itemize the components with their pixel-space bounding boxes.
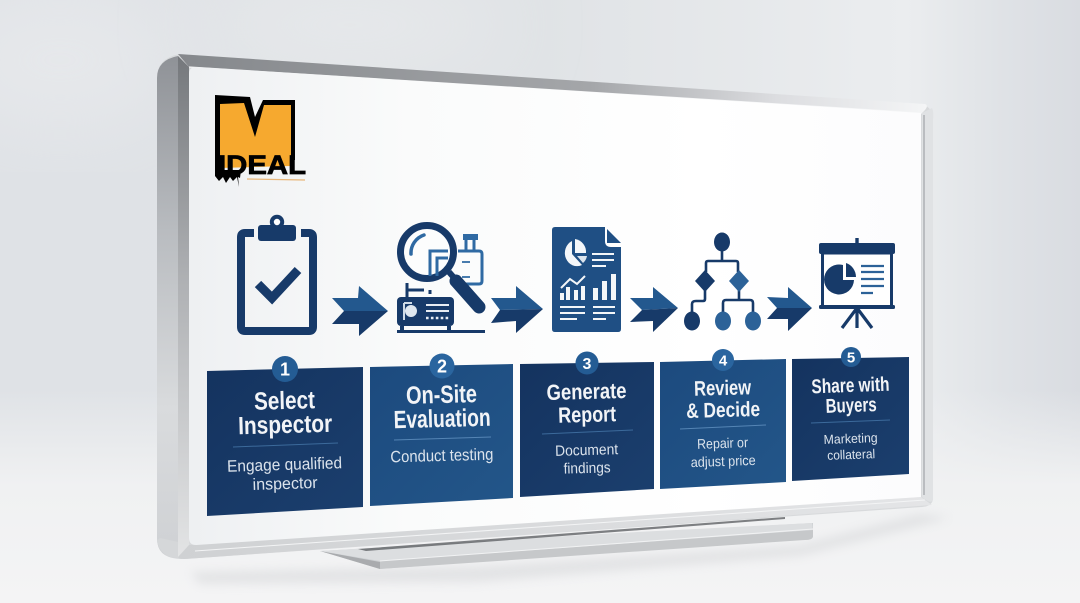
card 5: Share with Buyers: 5 [847, 350, 855, 366]
frame left side [157, 56, 178, 558]
card 1: Select Inspector: 1 [280, 360, 290, 380]
icon: magnifier over testing device [397, 226, 485, 333]
card 4: Review & Decide [660, 349, 786, 489]
frame top edge [178, 54, 927, 113]
frame bottom edge [178, 497, 932, 559]
shadow beneath the board [190, 514, 950, 584]
whiteboard frame [157, 54, 933, 559]
badge 3 [576, 352, 598, 374]
description 3: Document [555, 441, 619, 460]
heading 1 [237, 386, 333, 440]
trend and bars [561, 276, 585, 288]
badge 5 [841, 347, 861, 367]
card 2: On-Site Evaluation: 2 [437, 356, 447, 376]
logo drips [215, 170, 241, 187]
magnifier lens [400, 226, 454, 278]
heading 1: Inspector [238, 410, 333, 440]
description 1 [227, 454, 343, 495]
badge 4 [712, 349, 734, 371]
card 4: Review & Decide: 4 [719, 352, 728, 370]
description 5: Marketing [823, 430, 878, 447]
card 3: Generate Report [520, 352, 654, 497]
badge 2 [430, 354, 454, 378]
heading 3 [546, 378, 627, 428]
heading 5: Share with [811, 374, 890, 398]
logo wordmark: IDEAL [218, 150, 306, 180]
heading 2: Evaluation [393, 404, 491, 434]
description 1: inspector [252, 474, 318, 494]
magnifier handle [449, 272, 456, 280]
device antenna [407, 283, 430, 298]
arrow 4 [767, 287, 812, 331]
description 3: findings [563, 459, 611, 478]
description 1: Engage qualified [227, 454, 342, 476]
badge 1 [272, 356, 298, 382]
description 3 [555, 441, 620, 478]
description 5: collateral [827, 446, 876, 463]
stand base [320, 517, 813, 569]
card 2: On-Site Evaluation [370, 354, 513, 506]
heading 2: On-Site [406, 380, 477, 410]
card 1: Select Inspector [207, 356, 363, 516]
heading 5: Buyers [825, 394, 877, 418]
icon: decision tree [684, 232, 761, 330]
heading 4 [685, 376, 760, 423]
card 5: Share with Buyers [792, 347, 909, 481]
heading 3: Report [558, 401, 617, 428]
testing bottle [458, 237, 482, 284]
description 5 [823, 430, 878, 463]
pie chart [565, 241, 582, 266]
description 4 [690, 434, 756, 470]
white writing surface [189, 67, 921, 545]
frame right edge [922, 108, 933, 502]
arrow 1 [332, 286, 388, 336]
icon: clipboard with check [241, 217, 313, 331]
text lines [592, 254, 614, 266]
icon: presentation screen [819, 238, 895, 328]
heading 4: Review [694, 376, 752, 401]
card 3: Generate Report: 3 [583, 356, 592, 373]
heading 4: & Decide [686, 398, 760, 423]
heading 1: Select [254, 386, 316, 416]
heading 2 [393, 380, 491, 434]
heading 3: Generate [546, 378, 627, 405]
logo: M IDEAL [215, 95, 306, 187]
slide pie chart [824, 264, 854, 294]
frame left inner bevel [178, 56, 189, 558]
arrow 3 [630, 287, 678, 332]
heading 5 [811, 374, 890, 418]
description 4: adjust price [690, 452, 756, 470]
device body [397, 297, 454, 326]
slide text lines [861, 266, 884, 293]
arrow 2 [491, 286, 543, 333]
description 4: Repair or [697, 434, 749, 452]
device base line [397, 330, 485, 333]
icon: report document [552, 227, 621, 332]
description 2: Conduct testing [390, 446, 494, 466]
